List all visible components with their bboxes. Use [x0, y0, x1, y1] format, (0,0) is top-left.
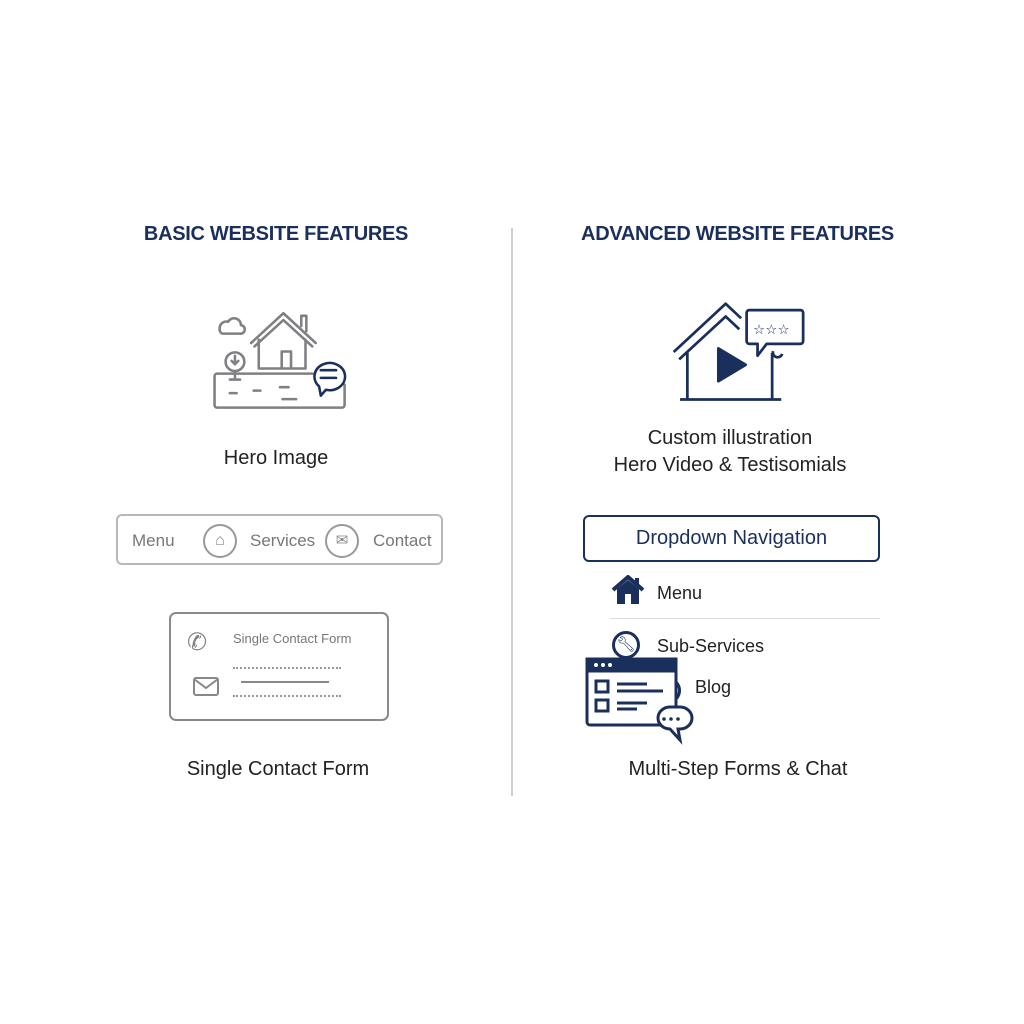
icon: home circle: ⌂ [215, 532, 225, 549]
icon: hero image landscape [213, 312, 346, 409]
dropdown navigation button: Dropdown Navigation [636, 527, 827, 549]
label: custom illustration: Custom illustration [648, 427, 812, 449]
dropdown navigation button [583, 515, 880, 562]
icon: phone: ✆ [187, 629, 207, 656]
icon: wrench circle [612, 631, 640, 659]
menu label: Menu [132, 531, 175, 550]
dropdown item: sub-services [612, 631, 764, 658]
dropdown item: menu: Menu [657, 583, 702, 603]
nav bar basic [116, 514, 443, 565]
icon: house video testimonials [672, 302, 804, 401]
divider [511, 228, 513, 796]
label: hero image: Hero Image [224, 447, 328, 469]
form title: Single Contact Form [233, 631, 352, 646]
icon: home [612, 575, 644, 604]
icon: mail circle [325, 524, 359, 558]
icon: house video testimonials: ☆☆☆ [753, 322, 790, 337]
heading: advanced: ADVANCED WEBSITE FEATURES [581, 223, 894, 245]
label: custom illustration: Hero Video & Testisomials [614, 454, 846, 476]
dropdown item: menu [610, 574, 880, 619]
heading: basic: BASIC WEBSITE FEATURES [144, 223, 408, 245]
icon: mail [193, 677, 219, 696]
contact label: Contact [373, 531, 432, 550]
icon: wrench circle: 🔧︎ [616, 636, 636, 653]
dropdown item: blog: Blog [695, 677, 731, 697]
dropdown item: sub-services: Sub-Services [657, 636, 764, 656]
icon: forms and chat [586, 658, 694, 745]
label: custom illustration [614, 427, 846, 476]
icon: mail circle: ✉ [336, 532, 348, 549]
label: multi-step forms: Multi-Step Forms & Chat [629, 758, 847, 780]
services label: Services [250, 531, 315, 550]
icon: home circle [203, 524, 237, 558]
contact form card [169, 612, 389, 721]
label: single contact form: Single Contact Form [187, 758, 369, 780]
